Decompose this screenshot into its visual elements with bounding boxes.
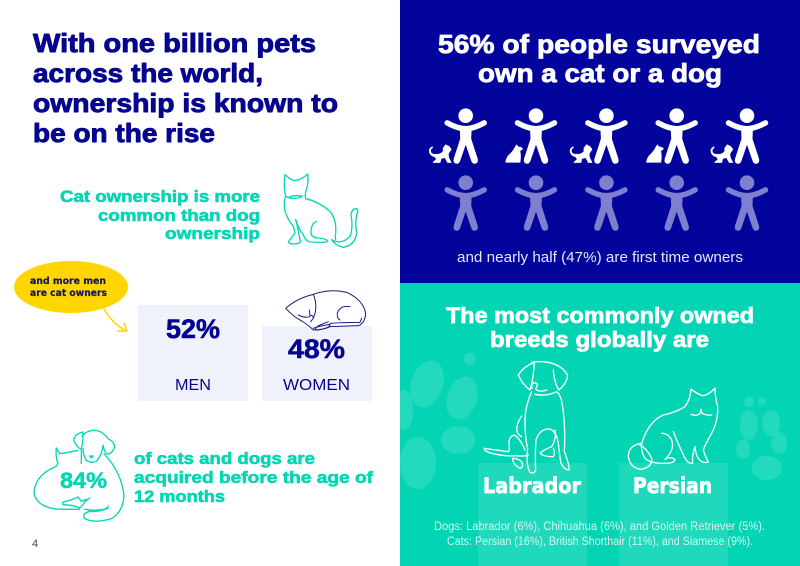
panel: breeds	[395, 283, 800, 566]
label: Labrador: Labrador	[483, 474, 582, 498]
title: across the world,	[33, 58, 263, 88]
text: 84%: 84%	[60, 468, 107, 493]
panel: men stat: 52%	[166, 314, 220, 344]
icons: cats and dogs	[429, 144, 733, 163]
panel: white left background	[0, 0, 400, 566]
text: cat ownership statement	[60, 187, 260, 243]
heading: breeds	[446, 303, 754, 352]
title: ownership is known to	[33, 88, 338, 118]
text: breed percentages: Cats: Persian (16%), British Shorthair (11%), and Siamese (9%).	[447, 536, 753, 548]
title: With one billion pets	[33, 28, 316, 58]
callout: yellow bubble: and more men	[30, 276, 106, 287]
text: cat ownership statement: common than dog	[98, 206, 260, 225]
icon: cat and dog outline	[34, 430, 124, 521]
text: breed percentages	[434, 521, 765, 548]
text: acquired statement: acquired before the age of	[134, 468, 373, 487]
icons: people row, faded	[447, 175, 766, 231]
panel: women stat	[262, 326, 372, 401]
arrow: callout to men	[104, 309, 127, 331]
text: cat ownership statement: Cat ownership is more	[60, 187, 260, 206]
panel: men stat: MEN	[175, 377, 211, 394]
panel: women stat: 48%	[288, 334, 345, 364]
decoration: paw prints	[395, 353, 787, 489]
icons: people row, white	[447, 108, 766, 164]
heading: survey	[438, 29, 760, 88]
label: Persian: Persian	[633, 474, 712, 498]
title: be on the rise	[33, 118, 215, 148]
text: acquired statement: 12 months	[134, 487, 225, 506]
text: acquired statement	[134, 449, 373, 506]
panel: men stat	[138, 305, 248, 401]
decoration: breed columns	[478, 463, 728, 566]
text: acquired statement: of cats and dogs are	[134, 449, 315, 468]
icon: persian outline	[628, 388, 718, 469]
text: first time owners: and nearly half (47%) are first time owners	[457, 250, 743, 266]
icon: sleeping cat outline	[286, 291, 366, 330]
heading: breeds: breeds globally are	[490, 327, 709, 352]
heading: survey: own a cat or a dog	[478, 58, 722, 88]
callout: yellow bubble: are cat owners	[30, 288, 107, 299]
icon: labrador outline	[484, 362, 569, 473]
text: breed percentages: Dogs: Labrador (6%), Chihuahua (6%), and Golden Retriever (5%).	[434, 521, 765, 533]
text: cat ownership statement: ownership	[165, 224, 260, 243]
title	[33, 28, 338, 148]
callout: yellow bubble	[14, 261, 128, 313]
text: page number: 4	[32, 538, 38, 550]
icon: standing cat outline	[284, 174, 358, 247]
heading: survey: 56% of people surveyed	[438, 29, 760, 59]
panel: women stat: WOMEN	[283, 377, 350, 394]
heading: breeds: The most commonly owned	[446, 303, 754, 328]
panel: survey	[400, 0, 800, 283]
